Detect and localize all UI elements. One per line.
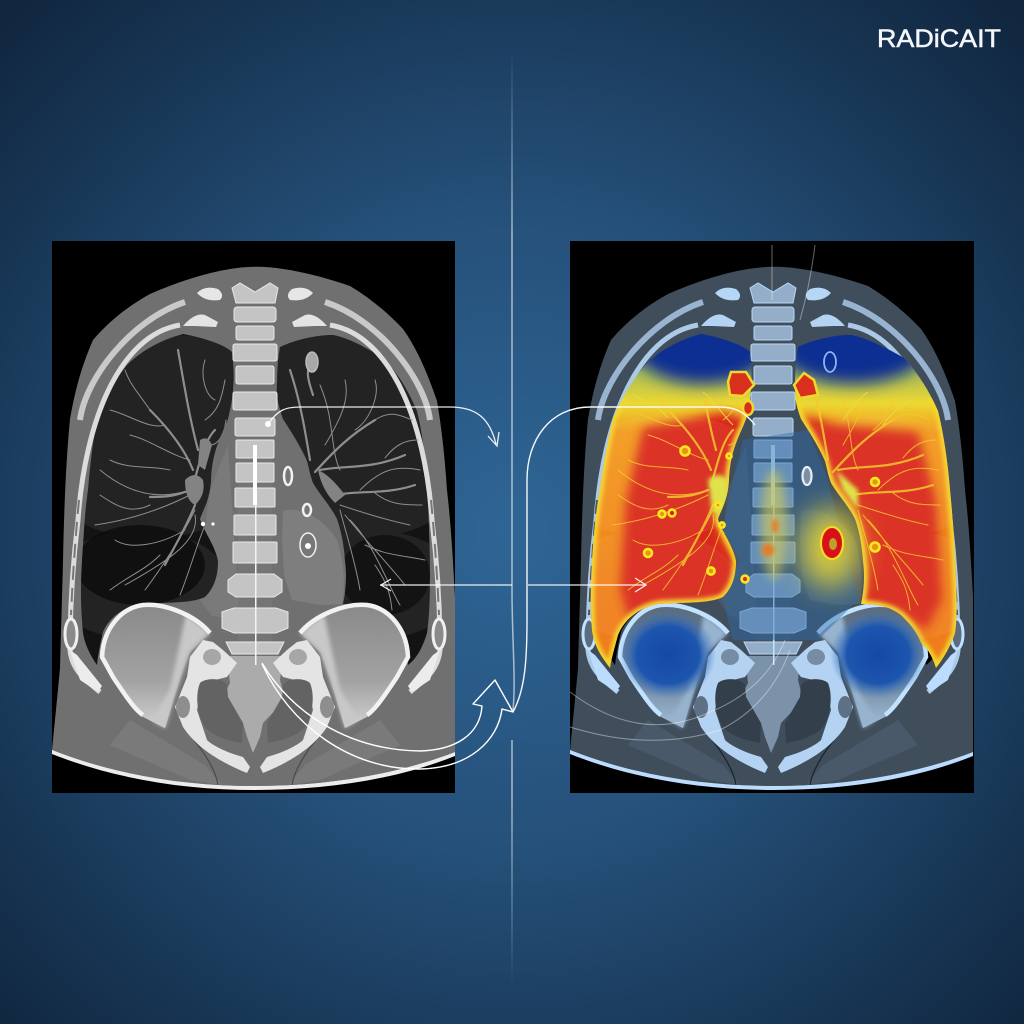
arrow: right horizontal (528, 578, 646, 592)
blue mediastinum wash (723, 430, 858, 640)
blue upper lung zones (638, 334, 920, 398)
logo text: RADiCAIT (877, 25, 1001, 53)
calcified ring (802, 467, 812, 485)
arrow: left horizontal (380, 579, 512, 591)
heat lung rim (590, 398, 957, 668)
hilum masses (185, 438, 345, 505)
spine hot spots (762, 519, 778, 556)
nodule: upper right lung (306, 352, 318, 372)
hilum glow (708, 470, 858, 515)
arrow: upper curve from heat map to lower arrowhead (513, 407, 755, 712)
arrow: upper curve from CT to divider (268, 407, 499, 446)
vertical divider line (512, 50, 514, 985)
spine glow (761, 470, 787, 580)
heat vessels (612, 398, 944, 610)
heart glow (800, 508, 860, 588)
tinted anatomy (568, 267, 978, 790)
panel: AI heat map CT scan (558, 241, 993, 793)
main tumour (820, 526, 844, 560)
faint annotation lines on heat map (570, 245, 815, 740)
upper red masses (728, 372, 818, 415)
blue area of upper lung ring (824, 352, 836, 372)
ilium blue wash (620, 611, 926, 699)
nodule: calcified rings (284, 467, 316, 557)
lung vessels (95, 350, 425, 610)
lung heat map (590, 334, 957, 668)
heat nodules (644, 446, 880, 582)
panel: original CT scan (50, 241, 460, 793)
arrow: pelvic curves into large outlined arrowhead (262, 663, 513, 769)
bright specks (201, 421, 311, 549)
